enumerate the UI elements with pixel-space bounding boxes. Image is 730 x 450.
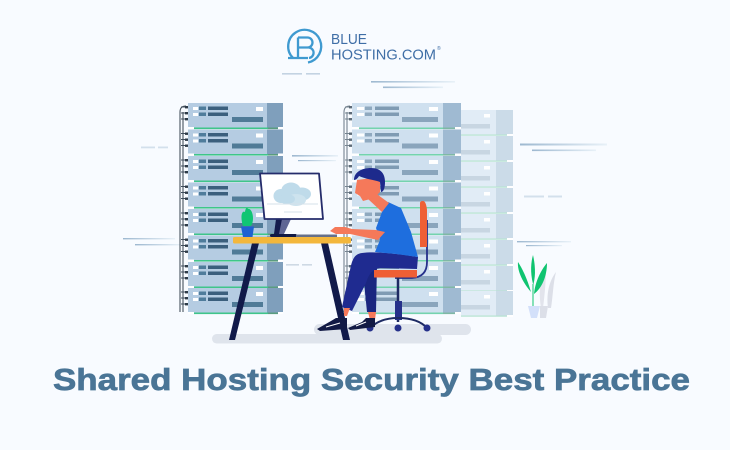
back leg <box>363 265 377 312</box>
left server rack <box>180 103 283 314</box>
chair base <box>397 277 399 322</box>
icon: cloud <box>274 182 311 206</box>
hair <box>354 168 385 192</box>
front leg <box>342 252 418 311</box>
chair back <box>420 201 427 247</box>
desk legs <box>229 243 259 340</box>
right server rack <box>344 103 461 314</box>
background server rack <box>461 110 513 317</box>
icon: potted plant right <box>518 255 556 318</box>
icon: logo B badge <box>288 30 321 62</box>
chair seat <box>374 270 417 278</box>
logo wordmark: HOSTING.COM <box>331 48 436 64</box>
logo wordmark <box>331 32 441 64</box>
logo wordmark: BLUE <box>331 32 367 48</box>
title: Shared Hosting Security Best Practice <box>53 363 690 397</box>
shirt <box>375 202 418 257</box>
monitor stand <box>275 219 291 234</box>
neck <box>368 192 389 212</box>
back shoe <box>348 318 375 330</box>
keyboard <box>270 234 337 237</box>
person <box>317 168 418 331</box>
desk <box>229 237 351 340</box>
chair <box>366 201 430 332</box>
arm skin <box>330 227 385 240</box>
icon: desk plant <box>241 208 254 237</box>
logo wordmark: ® <box>437 45 441 52</box>
chair frame <box>395 220 427 278</box>
front shoe <box>317 318 347 331</box>
decorative dashes <box>123 73 607 266</box>
monitor screen <box>260 174 323 219</box>
logo <box>288 30 441 64</box>
desk top <box>233 237 351 244</box>
floor shadow <box>212 324 471 344</box>
monitor <box>260 174 323 234</box>
face <box>355 177 380 201</box>
